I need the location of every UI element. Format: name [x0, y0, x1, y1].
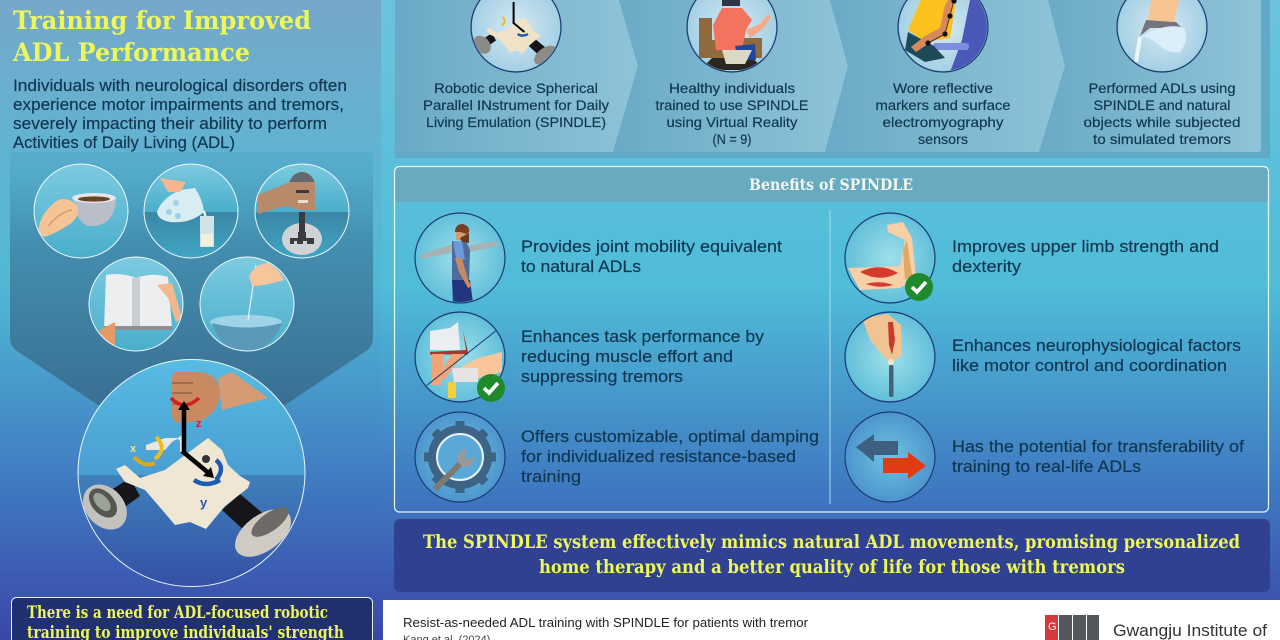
icon: reading a book: [89, 257, 183, 351]
icon: hand grip neuro: [845, 312, 935, 402]
step 4 text: SPINDLE and natural: [1094, 97, 1230, 113]
intro text: experience motor impairments and tremors,: [13, 95, 344, 114]
citation: [403, 615, 809, 640]
title: ADL Performance: [12, 38, 250, 68]
benefit 3 text: training: [521, 468, 581, 486]
benefit 1 text: [521, 238, 782, 276]
panel: footer: [383, 600, 1280, 640]
panel: benefits: [394, 166, 1269, 512]
icon: joint mobility: [415, 213, 505, 303]
step 3 text: electromyography: [882, 114, 1004, 130]
step 2 text: using Virtual Reality: [666, 114, 798, 130]
icon: reflective markers: [898, 0, 990, 72]
benefit 4 text: [952, 238, 1219, 276]
benefit 2 text: reducing muscle effort and: [521, 348, 733, 366]
step 2 text: trained to use SPINDLE: [656, 97, 808, 113]
icon: check badge: [905, 273, 933, 301]
icon: SPINDLE robot in circle: [74, 359, 306, 588]
logo: GIST: Gwangju Institute of: [1113, 622, 1267, 640]
step 2 chevron: [613, 0, 848, 152]
step 1 text: Robotic device Spherical: [434, 80, 598, 96]
benefit 6 text: Has the potential for transferability of: [952, 438, 1244, 456]
step 2 text: Healthy individuals: [669, 80, 795, 96]
panel: study steps: [395, 0, 1270, 158]
icon: transfer arrows: [845, 412, 935, 502]
benefit 6 text: training to real-life ADLs: [952, 458, 1141, 476]
benefit 4 text: dexterity: [952, 258, 1022, 276]
icon: robot small: [470, 0, 561, 72]
step 3 text: [876, 80, 1011, 147]
step 1 text: Living Emulation (SPINDLE): [426, 114, 606, 130]
step 4 text: Performed ADLs using: [1088, 80, 1236, 96]
panel: left column: [0, 0, 381, 640]
title: [12, 6, 311, 68]
icon: gear and wrench: [415, 412, 505, 502]
benefit 6 text: [952, 438, 1244, 476]
intro text: [13, 76, 347, 152]
benefit 3 text: for individualized resistance-based: [521, 448, 796, 466]
step 1 text: [423, 80, 609, 130]
step 1 chevron: [395, 0, 638, 152]
icon: VR user: [687, 0, 777, 72]
benefit 5 text: Enhances neurophysiological factors: [952, 337, 1241, 355]
logo: GIST: G: [1048, 621, 1057, 633]
step 3 text: sensors: [918, 131, 968, 147]
panel: conclusion: home therapy and a better quality of life for those with tremors: [539, 557, 1125, 578]
step 4 chevron: [1039, 0, 1261, 152]
benefit 2 text: Enhances task performance by: [521, 328, 765, 346]
panel: ADL examples backdrop: [10, 152, 373, 405]
icon: SPINDLE robot in circle: x: [130, 443, 137, 455]
intro text: Activities of Daily Living (ADL): [13, 133, 235, 152]
icon: holding a cup: [34, 164, 128, 258]
logo: GIST: [1045, 615, 1267, 640]
benefit 2 text: [521, 328, 765, 386]
step 3 text: Wore reflective: [893, 80, 993, 96]
icon: threading into bowl: [200, 257, 294, 352]
step 3 text: markers and surface: [876, 97, 1011, 113]
step 1 text: Parallel INstrument for Daily: [423, 97, 609, 113]
panel: conclusion: [394, 519, 1270, 592]
benefit 5 text: like motor control and coordination: [952, 357, 1227, 375]
citation: Resist-as-needed ADL training with SPINDLE for patients with tremor: [403, 615, 809, 630]
step 4 text: to simulated tremors: [1093, 131, 1231, 147]
step 4 text: objects while subjected: [1084, 114, 1240, 130]
callout: need for training: There is a need for ADL-focused robotic: [27, 603, 328, 622]
benefit 3 text: Offers customizable, optimal damping: [521, 428, 819, 446]
step 2 text: [656, 80, 808, 147]
icon: gear shift: [254, 164, 350, 259]
benefit 1 text: to natural ADLs: [521, 258, 641, 276]
icon: pouring under tremor: [1117, 0, 1207, 72]
icon: task performance: [415, 312, 505, 402]
step 3 chevron: [825, 0, 1065, 152]
step 4 text: [1084, 80, 1240, 147]
intro text: Individuals with neurological disorders often: [13, 76, 347, 95]
intro text: severely impacting their ability to perform: [13, 114, 327, 133]
benefit 4 text: Improves upper limb strength and: [952, 238, 1219, 256]
benefit 1 text: Provides joint mobility equivalent: [521, 238, 782, 256]
callout: need for training: [12, 598, 372, 640]
benefit 5 text: [952, 337, 1241, 375]
icon: SPINDLE robot in circle: z: [196, 418, 202, 430]
benefit 3 text: [521, 428, 819, 486]
icon: arm muscles: [845, 213, 935, 303]
title: Training for Improved: [13, 6, 311, 36]
icon: SPINDLE robot in circle: y: [200, 495, 208, 510]
benefits heading: Benefits of SPINDLE: [749, 175, 913, 194]
benefit 2 text: suppressing tremors: [521, 368, 683, 386]
step 2 text: (N = 9): [712, 131, 752, 147]
icon: check badge: [477, 374, 505, 402]
icon: pouring water: [144, 164, 238, 259]
